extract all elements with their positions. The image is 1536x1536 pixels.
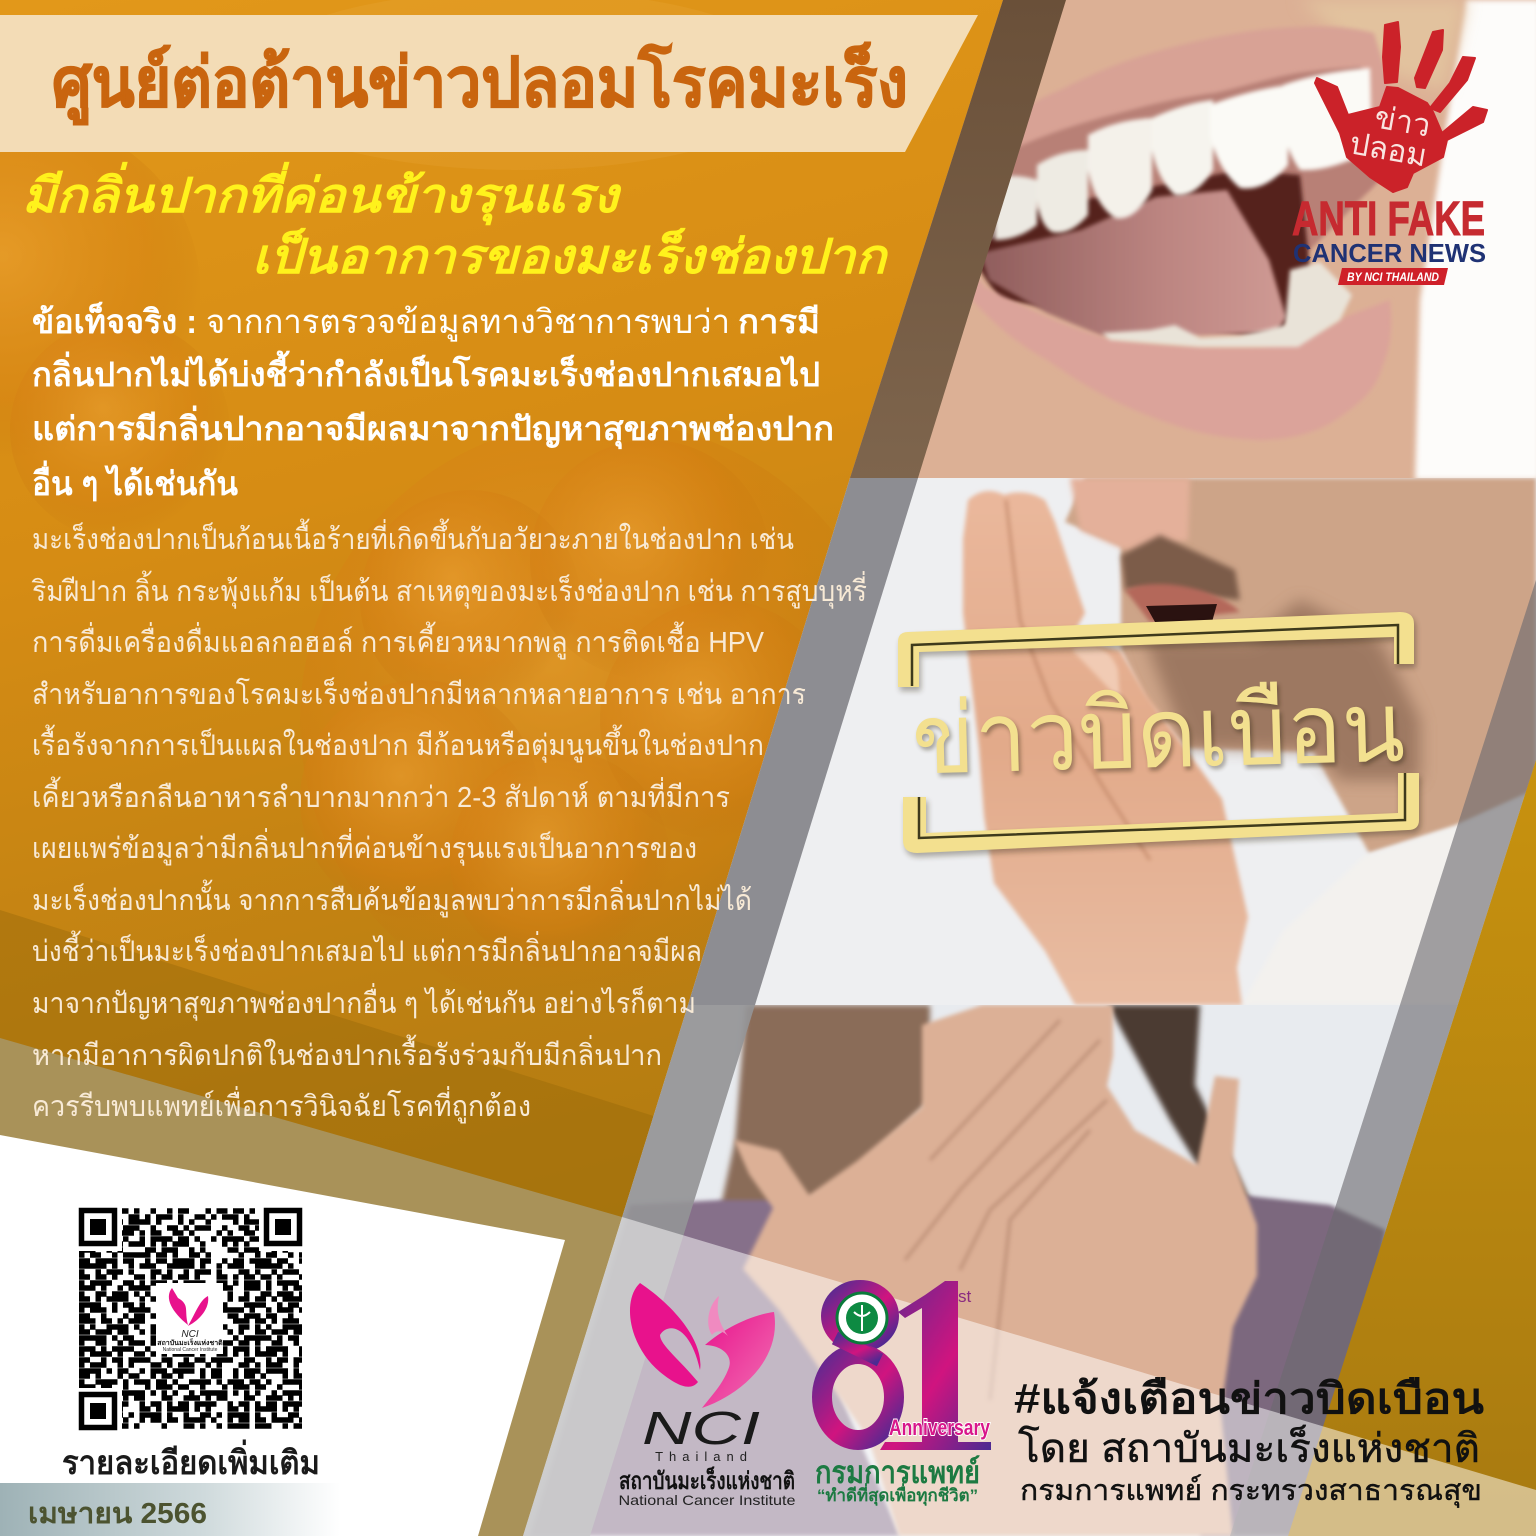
stamp frame shadows xyxy=(900,616,1421,857)
photo: woman covering mouth with hands xyxy=(520,1005,1536,1536)
photo: open mouth with teeth xyxy=(850,0,1536,480)
QR finder: bottom-left xyxy=(76,1388,122,1433)
QR modules xyxy=(79,1211,302,1426)
text block: fact statement xyxy=(32,301,834,502)
emblem centre xyxy=(846,1302,878,1334)
strip: top left diagonal xyxy=(850,0,1066,478)
text block: fact statement: อื่น ๆ ได้เช่นกัน xyxy=(32,460,238,502)
stamp frame bottom line xyxy=(919,773,1405,838)
text block: fact statement: จากการตรวจข้อมูลทางวิชาการพบว่า xyxy=(206,303,730,342)
emblem: department seal xyxy=(837,1293,887,1343)
emblem caduceus xyxy=(854,1305,870,1331)
QR centre logo: National Cancer Institute xyxy=(163,1347,218,1353)
label: hand text: ปลอม xyxy=(1347,125,1430,173)
subtitle: claim xyxy=(22,161,889,284)
overlay: pale bottom panel behind logos xyxy=(523,1217,1536,1536)
badge: by NCI Thailand xyxy=(1338,268,1448,285)
subtitle: claim: เป็นอาการของมะเร็งช่องปาก xyxy=(252,227,889,284)
QR centre logo: NCI xyxy=(181,1329,199,1340)
text block: explanation: เผยแพร่ข้อมูลว่ามีกลิ่นปากที่ค่อนข้างรุนแรงเป็นอาการของ xyxy=(32,828,697,866)
QR code xyxy=(76,1205,305,1433)
shirt left xyxy=(590,1197,900,1536)
text block: fact statement: การมี xyxy=(738,303,820,340)
text block: explanation: เรื้อรังจากการเป็นแผลในช่องปาก มีก้อนหรือตุ่มนูนขึ้นในช่องปาก xyxy=(32,724,764,763)
text block: explanation: เคี้ยวหรือกลืนอาหารลำบากมากกว่า 2-3 สัปดาห์ ตามที่มีการ xyxy=(32,776,730,814)
label: Department of Medical Services: กรมการแพทย์ xyxy=(815,1455,980,1490)
strip: lower left diagonal xyxy=(523,1005,755,1536)
label: NCI script: NCI xyxy=(642,1402,760,1454)
gold block: lower right xyxy=(1288,760,1536,1536)
panel: white QR area xyxy=(0,1135,565,1536)
shirt xyxy=(1370,794,1525,854)
stamp frame top line xyxy=(912,625,1398,686)
logo: Anti Fake Cancer News xyxy=(1292,22,1487,285)
icon: red hand print xyxy=(1315,22,1487,192)
stamp text shadow: ข่าวบิดเบือน xyxy=(913,675,1408,797)
title band xyxy=(0,15,978,152)
text block: explanation: บ่งชี้ว่าเป็นมะเร็งช่องปากเสมอไป แต่การมีกลิ่นปากอาจมีผล xyxy=(32,930,702,968)
label: by NCI Thailand: BY NCI THAILAND xyxy=(1347,270,1439,284)
label: Thailand: Thailand xyxy=(655,1449,753,1464)
QR centre logo: สถาบันมะเร็งแห่งชาติ xyxy=(157,1338,223,1347)
numeral 1 xyxy=(880,1281,991,1450)
background: cancer cell texture xyxy=(0,0,900,1020)
background: tan diagonal band xyxy=(0,1038,622,1536)
panel: date band xyxy=(0,1483,340,1536)
organisation: โดย สถาบันมะเร็งแห่งชาติ xyxy=(1018,1424,1480,1471)
hands xyxy=(734,1005,1257,1536)
hashtag: #แจ้งเตือนข่าวบิดเบือน xyxy=(1014,1375,1484,1422)
QR centre logo xyxy=(156,1283,223,1354)
strip: middle left diagonal xyxy=(688,478,918,1005)
label: Thai institute name: สถาบันมะเร็งแห่งชาติ xyxy=(619,1466,795,1495)
text block: explanation: มาจากปัญหาสุขภาพช่องปากอื่น ๆ ได้เช่นกัน อย่างไรก็ตาม xyxy=(32,983,696,1021)
label: slogan: “ทำดีที่สุดเพื่อทุกชีวิต” xyxy=(817,1483,978,1506)
text block: fact statement: แต่การมีกลิ่นปากอาจมีผลมาจากปัญหาสุขภาพช่องปาก xyxy=(32,405,834,450)
lower teeth xyxy=(1102,262,1352,347)
label: date: เมษายน 2566 xyxy=(28,1498,207,1530)
text block: explanation xyxy=(32,518,867,1124)
label: more details: รายละเอียดเพิ่มเติม xyxy=(62,1439,320,1481)
text block: explanation: สำหรับอาการของโรคมะเร็งช่องปากมีหลากหลายอาการ เช่น อาการ xyxy=(32,676,806,711)
numeral 8 xyxy=(822,1290,894,1440)
text block: fact statement: กลิ่นปากไม่ได้บ่งชี้ว่ากำลังเป็นโรคมะเร็งช่องปากเสมอไป xyxy=(32,350,820,393)
shirt right xyxy=(1200,1195,1385,1536)
logo: 81st anniversary xyxy=(815,1281,991,1506)
label: hand text xyxy=(1347,96,1435,173)
text block: explanation: มะเร็งช่องปากเป็นก้อนเนื้อร้ายที่เกิดขึ้นกับอวัยวะภายในช่องปาก เช่น xyxy=(32,518,794,556)
icon: pink butterfly xyxy=(630,1283,775,1408)
stamp frame top xyxy=(898,612,1414,687)
hand xyxy=(963,491,1248,1005)
text block: explanation: หากมีอาการผิดปกติในช่องปากเรื้อรังร่วมกับมีกลิ่นปาก xyxy=(32,1034,662,1072)
background: darker lower diagonal band xyxy=(0,910,660,1250)
subtitle: claim: มีกลิ่นปากที่ค่อนข้างรุนแรง xyxy=(22,161,622,226)
label: hand text: ข่าว xyxy=(1372,99,1433,144)
footer text: alert hashtag and organisation xyxy=(1014,1375,1484,1508)
label: st: st xyxy=(958,1287,972,1306)
text block: explanation: มะเร็งช่องปากนั้น จากการสืบค้นข้อมูลพบว่าการมีกลิ่นปากไม่ได้ xyxy=(32,879,752,918)
hair left xyxy=(720,1005,930,1210)
photo: man covering bad breath xyxy=(680,478,1536,1008)
logo: National Cancer Institute xyxy=(618,1283,796,1508)
stamp text: ข่าวบิดเบือน xyxy=(910,672,1406,794)
QR finder: top-right xyxy=(259,1205,305,1251)
hair right xyxy=(1108,1005,1262,1210)
face xyxy=(1065,478,1536,853)
text block: explanation: การดื่มเครื่องดื่มแอลกอฮอล์ การเคี้ยวหมากพลู การติดเชื้อ HPV xyxy=(32,621,765,660)
label: CANCER NEWS: CANCER NEWS xyxy=(1293,238,1486,268)
label: Anniversary: Anniversary xyxy=(889,1415,991,1440)
strip: right translucent grey diagonal xyxy=(1230,580,1536,1536)
title: ศูนย์ต่อต้านข่าวปลอมโรคมะเร็ง xyxy=(52,42,908,126)
text block: fact statement: ข้อเท็จจริง : xyxy=(32,301,197,340)
ministry: กรมการแพทย์ กระทรวงสาธารณสุข xyxy=(1020,1474,1482,1508)
stamp frame bottom xyxy=(903,773,1419,853)
stamp: distorted news xyxy=(898,612,1421,857)
text block: explanation: ริมฝีปาก ลิ้น กระพุ้งแก้ม เป็นต้น สาเหตุของมะเร็งช่องปาก เช่น การสูบบุหรี่ xyxy=(32,570,867,609)
QR finder: top-left xyxy=(76,1205,122,1251)
upper teeth xyxy=(951,68,1372,242)
text block: explanation: ควรรีบพบแพทย์เพื่อการวินิจฉัยโรคที่ถูกต้อง xyxy=(32,1086,531,1124)
label: English institute name: National Cancer Institute xyxy=(618,1492,796,1508)
